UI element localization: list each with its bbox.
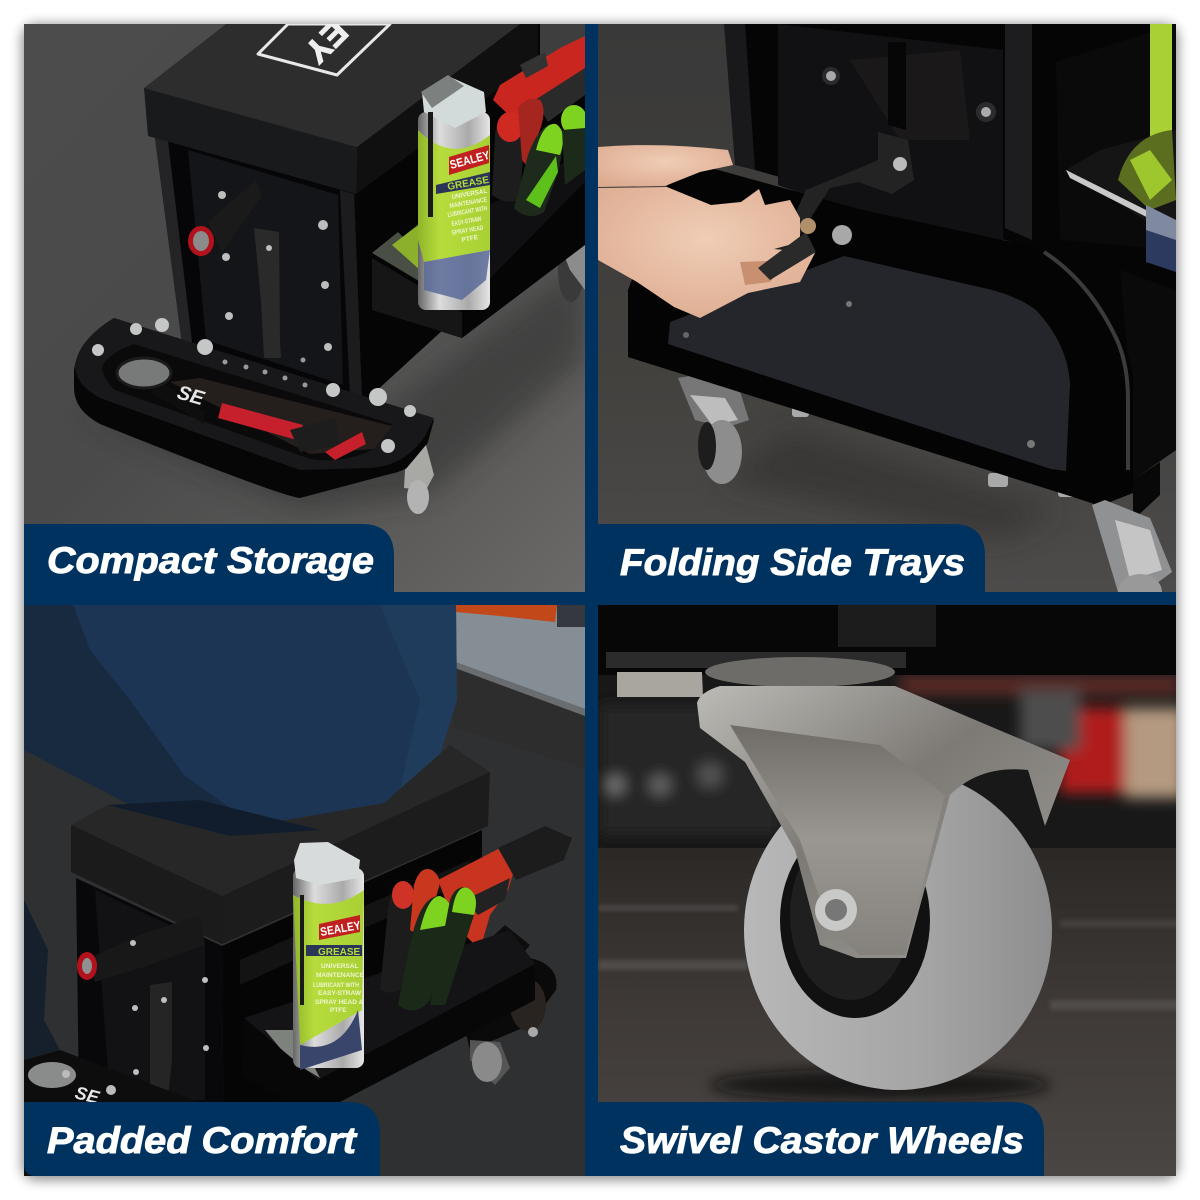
screwdrivers [380,869,476,1010]
caption: Padded Comfort [47,1120,358,1161]
spray can: PTFE [330,1007,347,1014]
person trousers [24,605,330,834]
front bracket [1133,462,1160,520]
floor [598,848,1176,1178]
caster shadow [744,436,1035,537]
spray can: UNIVERSAL [451,188,488,201]
orange item [450,605,557,622]
spray can: GREASE [447,175,490,193]
strap tail and snap [758,218,816,280]
strap [757,132,914,280]
left caster [678,375,749,484]
tray liner print: SE [175,382,207,410]
panel: swivel castor wheels photo [598,605,1185,1178]
panel: compact storage photo [24,13,587,592]
label tab: Swivel Castor Wheels [585,1102,1044,1176]
screwdrivers [492,99,587,216]
floor boards [598,905,1180,1010]
panel bolts [130,940,209,1075]
tray gloss rim [1044,252,1128,470]
flashlight [77,915,205,982]
tray underside panel [668,256,1070,471]
spray can: MAINTENANCE [316,972,365,979]
panel: folding side trays photo [598,24,1176,610]
tray recess [102,344,392,460]
seat top [144,24,520,147]
folding tray [74,318,434,498]
floor [598,24,1176,592]
bolts on face [218,191,332,351]
seat side [356,24,538,194]
right caster [1092,500,1172,610]
lower nuts [792,403,1080,497]
spray can: LUBRICANT WITH [313,982,359,989]
seat pad [71,745,490,944]
label tab: Compact Storage [24,524,394,592]
spray can [293,842,365,1070]
side tool tray [372,150,585,338]
cabinet right face [222,830,482,1176]
floor [24,605,585,1176]
background shelving [600,675,1185,835]
folded tray [628,168,1133,506]
seat front [144,88,357,194]
frame highlights [155,138,192,344]
back panel [778,24,1003,250]
tray bolt [832,225,852,245]
seat logo: EY [298,13,355,70]
floor [24,24,585,592]
seat body left face [155,138,362,404]
spray can: GREASE [318,947,361,958]
caption: Compact Storage [47,540,374,581]
strap [254,228,281,358]
spray can: SPRAY HEAD [451,224,484,237]
caption: Folding Side Trays [620,542,965,583]
spray can: EASY-STRAW [451,216,482,228]
lower foreground folded tray [24,1050,220,1176]
spray can: LUBRICANT WITH [447,205,488,219]
spray can: SEALEY [319,919,362,939]
strap [150,982,172,1115]
swivel plate [617,657,895,697]
right side panel [1056,24,1176,250]
drill [493,36,585,122]
folded tray behind [460,958,556,1055]
frame uprights [1005,24,1032,240]
background floor [440,605,585,712]
red hex keys [218,403,303,440]
wheel shadow [710,1069,1050,1101]
fork bracket [697,686,1070,958]
flashlight [188,226,214,256]
left face gloss panel [188,150,343,385]
caption: Swivel Castor Wheels [620,1120,1024,1161]
body right face [354,24,585,404]
spray can: MAINTENANCE [449,196,488,210]
drill [438,826,572,975]
blurred workshop background [598,605,1176,855]
checker plate step [453,662,585,769]
top frame bar [598,605,1176,675]
side shelf with can [1066,24,1176,480]
tray shadow [158,276,585,512]
rear caster [558,245,585,302]
label tab: Padded Comfort [24,1102,380,1176]
magnifier [117,358,171,388]
trouser fold over seat [107,800,320,836]
fixing bolts [822,67,996,122]
spray can: PTFE [461,234,479,244]
front caster [404,445,434,514]
person hoodie [73,605,457,822]
panel: padded comfort photo [24,605,585,1176]
spray can [418,75,492,310]
lower foreground folded tray: SE [73,1082,102,1108]
label tab: Folding Side Trays [585,524,985,592]
spray can: UNIVERSAL [321,963,359,970]
bolts [92,318,416,453]
boot and leg [24,900,60,1060]
cabinet body [724,24,1176,480]
spray can: SPRAY HEAD & [315,999,364,1006]
seat logo [256,24,392,76]
hands [598,145,815,318]
cabinet left face [76,878,224,1176]
rear caster [470,1040,510,1085]
wheel [744,770,1052,1090]
spray can: SEALEY [448,149,492,172]
spray can: EASY-STRAW [318,990,362,997]
tool tray [242,930,535,1116]
